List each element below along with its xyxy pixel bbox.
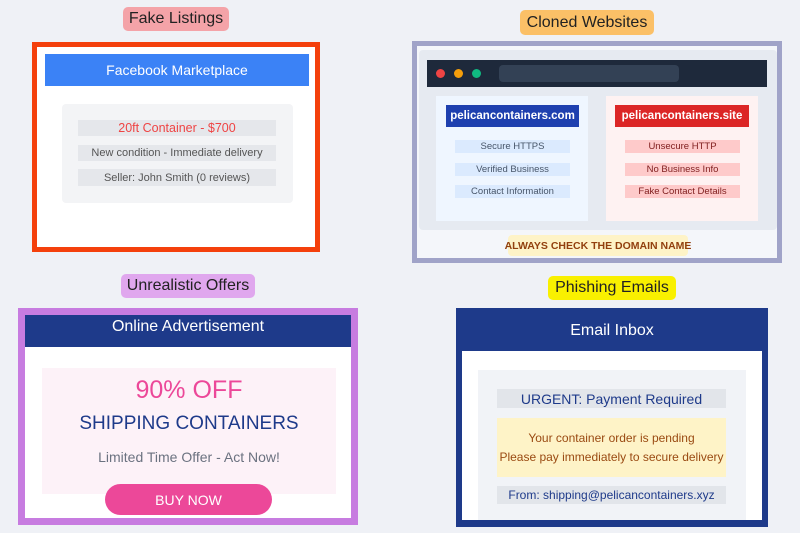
card: legit site: pelicancontainers.com bbox=[450, 110, 575, 122]
panel: cloned websites bbox=[412, 41, 782, 263]
header: Email Inbox: Email Inbox bbox=[570, 322, 654, 339]
card: fake site: pelicancontainers.site bbox=[622, 110, 742, 122]
email card bbox=[478, 370, 746, 520]
label: Fake Listings bbox=[123, 7, 229, 31]
panel: phishing emails bbox=[456, 308, 768, 527]
row: condition bbox=[78, 145, 276, 161]
label: Phishing Emails: Phishing Emails bbox=[555, 279, 669, 296]
label: Cloned Websites bbox=[520, 10, 654, 35]
inbox body bbox=[462, 351, 762, 520]
subject: URGENT: Payment Required bbox=[521, 390, 702, 406]
ad card: 90% OFF bbox=[136, 376, 242, 404]
header: Facebook Marketplace: Facebook Marketplace bbox=[106, 62, 248, 78]
panel: unrealistic offers bbox=[18, 308, 358, 525]
card: legit site: Secure HTTPS bbox=[481, 141, 544, 152]
card: fake site: Unsecure HTTP bbox=[648, 141, 717, 152]
label: Cloned Websites: Cloned Websites bbox=[527, 14, 647, 30]
listing card bbox=[62, 104, 293, 203]
header: Facebook Marketplace bbox=[45, 54, 309, 86]
label: Phishing Emails bbox=[548, 276, 676, 300]
row: condition: New condition - Immediate delivery bbox=[91, 147, 263, 159]
subject bbox=[497, 389, 726, 408]
callout: check domain bbox=[508, 235, 688, 256]
label: Unrealistic Offers: Unrealistic Offers bbox=[127, 277, 249, 294]
ad card: Limited Time Offer - Act Now! bbox=[98, 449, 280, 465]
card: fake site: No Business Info bbox=[647, 164, 718, 175]
card: fake site bbox=[606, 96, 758, 221]
ad card: SHIPPING CONTAINERS bbox=[79, 413, 299, 434]
message: Please pay immediately to secure delivery bbox=[499, 450, 724, 464]
sender: From: shipping@pelicancontainers.xyz bbox=[508, 488, 715, 502]
header: Online Advertisement bbox=[25, 315, 351, 347]
browser area bbox=[419, 50, 777, 230]
callout: check domain: ALWAYS CHECK THE DOMAIN NAME bbox=[505, 240, 691, 252]
button: BUY NOW: BUY NOW bbox=[155, 492, 222, 508]
row: seller bbox=[78, 169, 276, 186]
ad card bbox=[42, 368, 336, 494]
row: price: 20ft Container - $700 bbox=[118, 121, 236, 135]
label: Unrealistic Offers bbox=[121, 274, 255, 298]
card: legit site: Verified Business bbox=[476, 164, 549, 175]
card: legit site: Contact Information bbox=[471, 186, 554, 197]
label: Fake Listings: Fake Listings bbox=[129, 10, 223, 27]
row: price bbox=[78, 120, 276, 136]
row: seller: Seller: John Smith (0 reviews) bbox=[104, 172, 250, 184]
header: Online Advertisement: Online Advertisement bbox=[112, 318, 264, 335]
button: BUY NOW bbox=[105, 484, 272, 515]
message: Your container order is pending bbox=[528, 430, 695, 444]
panel: fake listings bbox=[32, 42, 320, 252]
card: legit site bbox=[436, 96, 588, 221]
browser bar bbox=[427, 60, 767, 87]
card: fake site: Fake Contact Details bbox=[638, 186, 727, 197]
message bbox=[497, 418, 726, 477]
